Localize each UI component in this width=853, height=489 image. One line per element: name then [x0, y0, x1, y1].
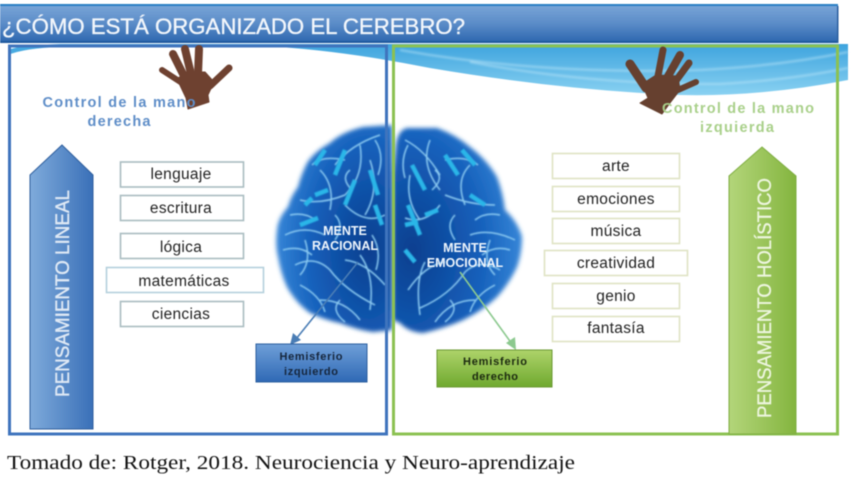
heading: control de la mano izquierda: Control de la mano: [662, 101, 814, 117]
box: hemisferio izquierdo: Hemisferio: [280, 351, 343, 363]
box: hemisferio derecho: [437, 350, 552, 387]
arrow: pensamiento holistico: PENSAMIENTO HOLÍSTICO: [755, 178, 776, 418]
item: emociones: [552, 186, 680, 212]
item: genio: genio: [596, 288, 636, 305]
panel: right hemisphere frame: [394, 46, 838, 434]
item: creatividad: [544, 250, 688, 276]
item: ciencias: [120, 302, 244, 326]
box: hemisferio derecho: derecho: [472, 371, 518, 383]
arrow: racional to hemisferio izquierdo: [290, 262, 358, 345]
background wave: [8, 44, 848, 95]
item: ciencias: ciencias: [152, 306, 210, 323]
title bar: [0, 4, 838, 43]
icon: right hand (left panel): [162, 49, 229, 109]
item: creatividad: creatividad: [577, 255, 655, 272]
caption: source: Tomado de: Rotger, 2018. Neurociencia y Neuro-aprendizaje: [7, 452, 575, 474]
item: matematicas: matemáticas: [138, 273, 230, 290]
item: escritura: [120, 196, 244, 220]
item: escritura: escritura: [150, 200, 212, 217]
title: ¿CÓMO ESTÁ ORGANIZADO EL CEREBRO?: [2, 14, 465, 39]
item: emociones: emociones: [577, 191, 655, 208]
item: arte: arte: [602, 158, 630, 175]
item: lenguaje: lenguaje: [150, 166, 212, 183]
item: logica: [120, 234, 244, 258]
box: hemisferio izquierdo: izquierdo: [284, 366, 338, 378]
item: lenguaje: [120, 162, 244, 187]
heading: control de la mano derecha: derecha: [88, 114, 151, 130]
brain: RACIONAL: [312, 239, 378, 253]
heading: control de la mano izquierda: [662, 101, 814, 136]
label: mente racional: MENTE: [323, 224, 367, 238]
arrow: pensamiento holistico: [729, 147, 796, 434]
arrow: pensamiento lineal: PENSAMIENTO LINEAL: [53, 190, 74, 397]
list: left concepts: [106, 162, 264, 326]
left hemisphere: [276, 125, 392, 332]
item: matematicas: [106, 268, 264, 292]
heading: control de la mano izquierda: izquierda: [700, 120, 775, 136]
right hemisphere: [393, 128, 522, 333]
label: mente emocional: MENTE: [443, 241, 487, 255]
item: musica: [552, 218, 680, 244]
icon: left hand (right panel): [630, 50, 696, 114]
arrow: emocional to hemisferio derecho: [460, 272, 516, 350]
heading: control de la mano derecha: Control de la mano: [42, 95, 196, 111]
arrow: pensamiento lineal: [30, 145, 93, 429]
brain: [276, 125, 522, 333]
item: genio: [552, 284, 680, 308]
box: hemisferio izquierdo: [256, 344, 367, 382]
box: hemisferio derecho: Hemisferio: [463, 356, 527, 368]
item: fantasia: fantasía: [587, 320, 645, 337]
item: fantasia: [552, 316, 680, 342]
list: right concepts: [544, 154, 688, 342]
item: arte: [552, 154, 680, 178]
item: logica: lógica: [160, 239, 202, 256]
panel: left hemisphere frame: [10, 46, 386, 434]
item: musica: música: [591, 223, 642, 240]
brain: EMOCIONAL: [427, 256, 504, 270]
heading: control de la mano derecha: [42, 95, 196, 130]
